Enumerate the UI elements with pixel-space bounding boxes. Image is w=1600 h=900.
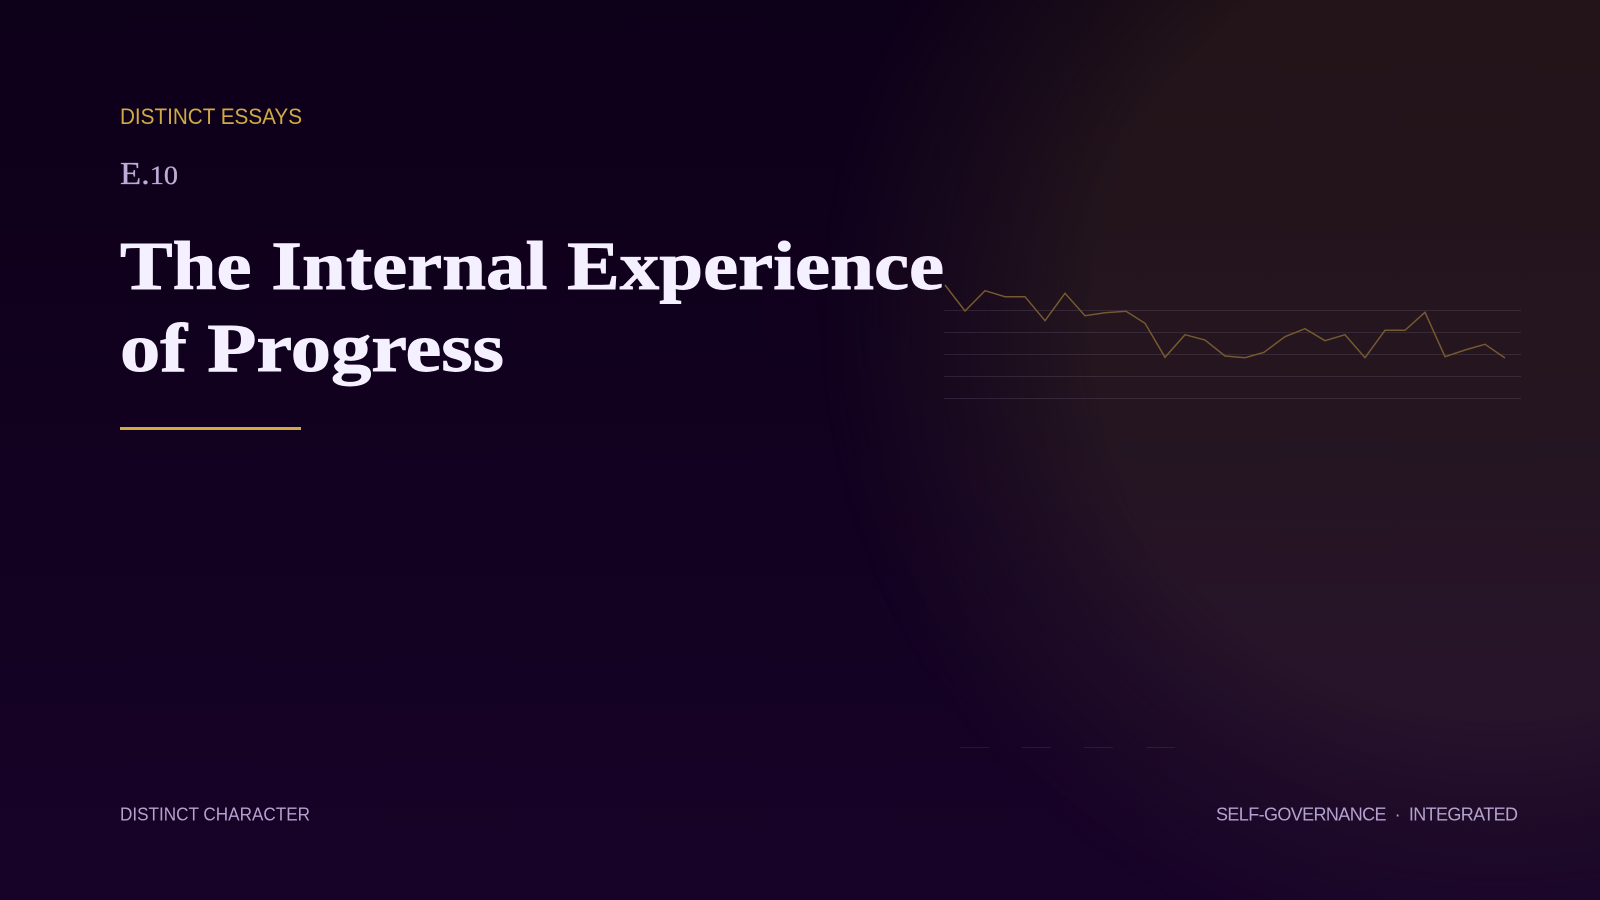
title: of Progress <box>120 310 504 386</box>
title rule <box>120 427 301 430</box>
chart: faint line chart with grid <box>944 285 1521 398</box>
faint dash marks <box>960 746 1175 748</box>
title <box>120 228 944 386</box>
warm glow <box>942 0 1600 835</box>
footer left: DISTINCT CHARACTER <box>120 804 310 824</box>
footer right: SELF-GOVERNANCE · INTEGRATED <box>1216 804 1518 824</box>
title: The Internal Experience <box>120 228 944 304</box>
essay number: E.10 <box>120 155 178 191</box>
eyebrow label: DISTINCT ESSAYS <box>120 104 302 129</box>
